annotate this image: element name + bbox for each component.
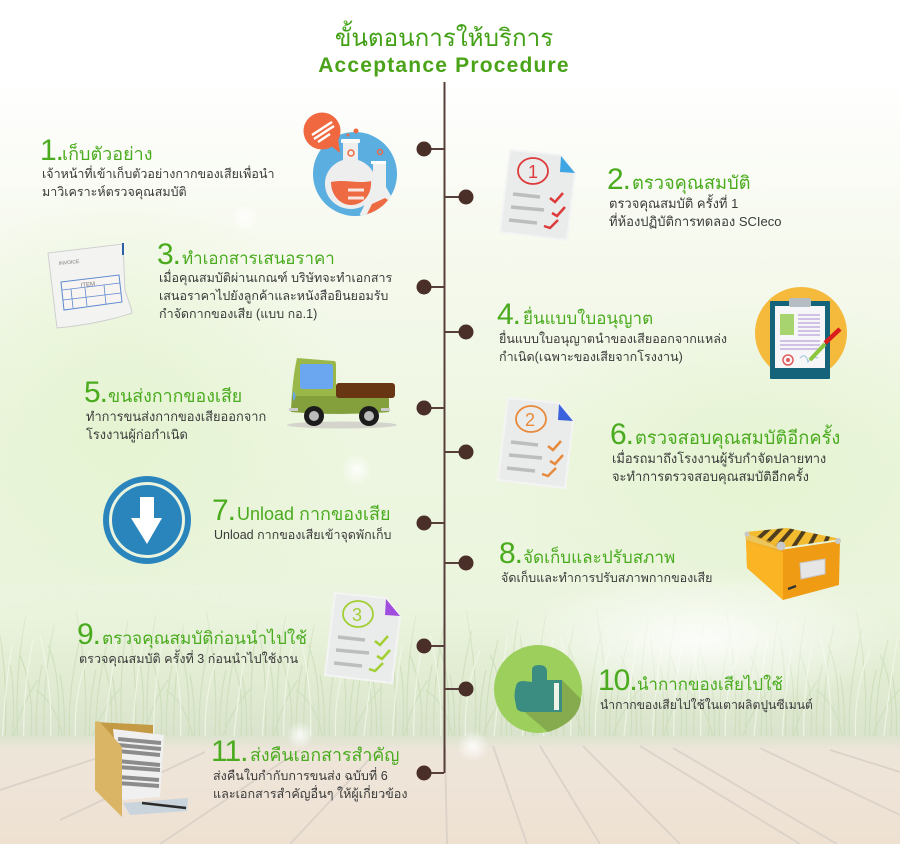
- step 2: ตรวจคุณสมบัติ: [632, 172, 751, 193]
- step 10: 10.: [598, 664, 637, 697]
- icon: checklist 1: [500, 150, 575, 240]
- step 3: เมื่อคุณสมบัติผ่านเกณฑ์ บริษัทจะทำเอกสาร: [159, 271, 392, 285]
- step 11: 11.: [211, 735, 247, 768]
- icon: clipboard with form: [755, 287, 847, 379]
- icon: download arrow: [103, 476, 191, 564]
- step 2: 2.: [607, 163, 630, 196]
- icon: checklist 3: [325, 593, 400, 683]
- step 1: เจ้าหน้าที่เข้าเก็บตัวอย่างกากของเสียเพื่อนำ: [42, 167, 274, 181]
- icon: thumbs up: [494, 645, 582, 733]
- title: [318, 20, 570, 77]
- step 1: เก็บตัวอย่าง: [62, 144, 153, 164]
- step 6: จะทำการตรวจสอบคุณสมบัติอีกครั้ง: [612, 469, 809, 484]
- step 11: และเอกสารสำคัญอื่นๆ ให้ผู้เกี่ยวข้อง: [213, 787, 408, 801]
- step 1: มาวิเคราะห์ตรวจคุณสมบัติ: [42, 185, 187, 199]
- step 5: โรงงานผู้ก่อกำเนิด: [86, 427, 188, 442]
- step 6: ตรวจสอบคุณสมบัติอีกครั้ง: [635, 427, 840, 448]
- step 11: ส่งคืนใบกำกับการขนส่ง ฉบับที่ 6: [213, 769, 388, 783]
- step 5: 5.: [84, 376, 107, 409]
- icon: invoice sheet: [48, 243, 132, 328]
- icon: green truck: [287, 358, 397, 428]
- step 3: 3.: [157, 238, 180, 271]
- step 8: จัดเก็บและปรับสภาพ: [523, 548, 675, 567]
- step 7: Unload กากของเสีย: [237, 504, 391, 524]
- icon: checklist 2: 2: [525, 410, 535, 430]
- step 3: [157, 238, 392, 321]
- step 3: เสนอราคาไปยังลูกค้าและหนังสือยินยอมรับ: [159, 289, 388, 303]
- icon: invoice sheet: INVOICE: [59, 259, 80, 267]
- step 3: ทำเอกสารเสนอราคา: [182, 249, 335, 268]
- step 7: Unload กากของเสียเข้าจุดพักเก็บ: [214, 528, 391, 542]
- icon: checklist 3: 3: [352, 605, 362, 625]
- title: ขั้นตอนการให้บริการ: [335, 25, 553, 52]
- step 10: นำกากของเสียไปใช้ในเตาผลิตปูนซีเมนต์: [600, 698, 813, 712]
- step 1: [40, 134, 274, 200]
- step 5: [84, 376, 266, 442]
- step 4: [497, 298, 727, 364]
- icon: checklist 1: 1: [528, 162, 538, 182]
- step 7: 7.: [212, 494, 235, 527]
- step 9: [77, 618, 307, 666]
- step 10: [598, 664, 813, 712]
- step 4: ยื่นแบบใบอนุญาต: [523, 309, 653, 328]
- step 3: กำจัดกากของเสีย (แบบ กอ.1): [159, 307, 317, 321]
- step 5: ทำการขนส่งกากของเสียออกจาก: [86, 409, 266, 424]
- icon: checklist 2: [498, 398, 573, 488]
- step 6: เมื่อรถมาถึงโรงงานผู้รับกำจัดปลายทาง: [612, 451, 826, 466]
- step 8: จัดเก็บและทำการปรับสภาพกากของเสีย: [501, 571, 712, 585]
- step 6: [610, 418, 840, 484]
- step 4: กำเนิด(เฉพาะของเสียจากโรงงาน): [499, 350, 683, 364]
- step 9: 9.: [77, 618, 100, 651]
- step 4: ยื่นแบบใบอนุญาตนำของเสียออกจากแหล่ง: [499, 332, 727, 346]
- icon: folder with documents: [95, 721, 188, 817]
- icon: invoice sheet: ITEM: [81, 282, 95, 289]
- step 6: 6.: [610, 418, 633, 451]
- step 10: นำกากของเสียไปใช้: [637, 675, 783, 694]
- step 11: ส่งคืนเอกสารสำคัญ: [250, 745, 399, 765]
- step 7: [212, 494, 391, 542]
- step 2: ที่ห้องปฏิบัติการทดลอง SCIeco: [609, 214, 782, 229]
- icon: lab flasks: [304, 112, 397, 220]
- step 9: ตรวจคุณสมบัติ ครั้งที่ 3 ก่อนนำไปใช้งาน: [79, 652, 298, 666]
- icon: storage box: [744, 526, 841, 600]
- title: Acceptance Procedure: [318, 54, 570, 77]
- step 5: ขนส่งกากของเสีย: [108, 386, 242, 406]
- step 8: [499, 537, 712, 585]
- step 8: 8.: [499, 537, 522, 570]
- step 11: [211, 735, 408, 802]
- step 2: [607, 163, 782, 229]
- step 9: ตรวจคุณสมบัติก่อนนำไปใช้: [102, 628, 307, 648]
- step 1: 1.: [40, 134, 63, 167]
- step 2: ตรวจคุณสมบัติ ครั้งที่ 1: [609, 196, 738, 211]
- step 4: 4.: [497, 298, 520, 331]
